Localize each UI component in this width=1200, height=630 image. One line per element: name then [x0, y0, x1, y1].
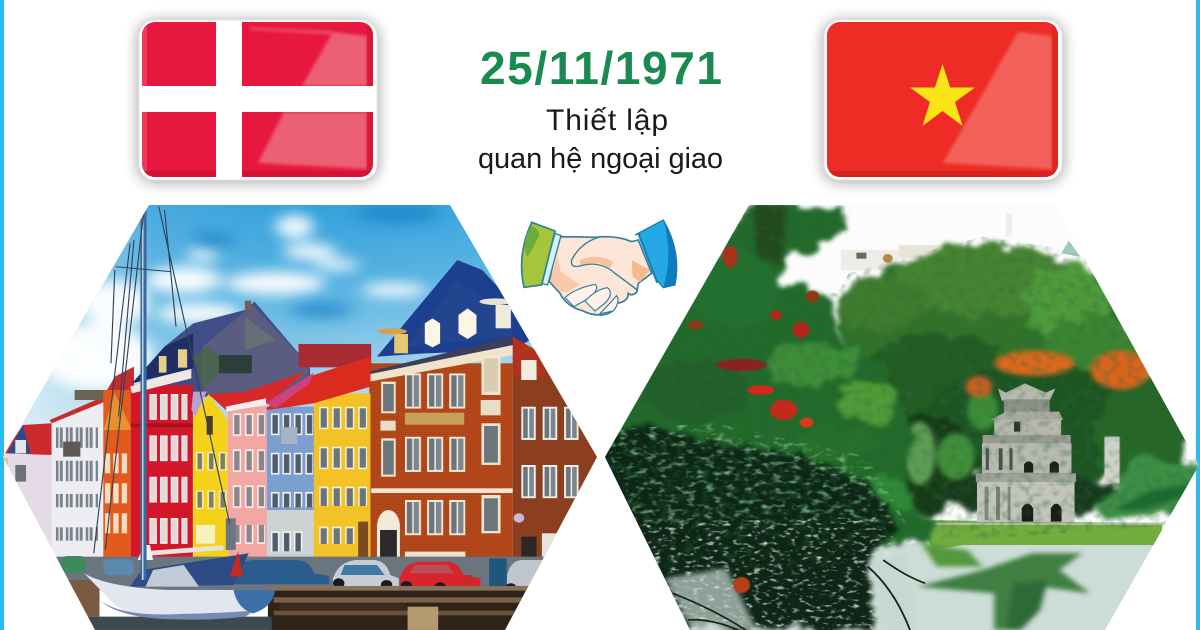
pink building: [228, 407, 267, 560]
fingers: [565, 284, 597, 307]
dark lower tree: [600, 423, 899, 630]
green cuff: [522, 222, 555, 287]
lake: [650, 543, 1154, 630]
background tree mass: [841, 243, 1193, 517]
light gaps between lower leaves: [640, 517, 894, 630]
brick building: [369, 363, 513, 577]
tree trunk top: [753, 203, 788, 267]
dock: [268, 586, 536, 630]
blue cuff: [635, 220, 677, 288]
grass bank: [918, 520, 1163, 550]
turtle tower: [976, 383, 1076, 522]
white building: [52, 398, 105, 560]
icon: star: [910, 64, 975, 126]
blue cuff band: [638, 232, 664, 282]
hand shading: [550, 255, 580, 292]
red flowers: [688, 246, 819, 593]
left pink white building: [3, 454, 52, 549]
open water patches: [665, 553, 918, 630]
caption: Thiết lập: [546, 104, 668, 137]
photo: Copenhagen Nyhavn harbour: [0, 200, 600, 630]
right border: [1196, 0, 1200, 630]
hands silhouette: [549, 237, 652, 315]
right leaves: [1094, 463, 1200, 520]
orange flame trees: [965, 351, 1150, 397]
orange building: [103, 390, 132, 560]
left border: [0, 0, 4, 630]
date heading: 25/11/1971: [480, 42, 722, 94]
quay and water: [68, 580, 100, 617]
red building: [131, 385, 193, 560]
lighter foliage accents: [903, 390, 998, 485]
distant skyline: [841, 207, 1080, 270]
street: [56, 556, 544, 590]
mast and rigging: [94, 207, 230, 580]
flag: Vietnam: [822, 20, 1064, 183]
upper right hand outline: [571, 237, 637, 290]
right pillar: [1104, 437, 1120, 483]
brick windows: [405, 373, 465, 409]
cars: [61, 556, 545, 593]
blue roof on brick building: [377, 260, 536, 357]
dark brick building: [513, 350, 600, 577]
flag: Denmark: [137, 20, 379, 183]
photo: Hoan Kiem lake and Turtle Tower: [600, 200, 1200, 630]
yellow building and red roof: [314, 393, 370, 560]
icon: handshake: [522, 220, 677, 315]
blue building: [267, 407, 315, 560]
left tree: [600, 203, 937, 573]
green flecks in dark tree: [609, 424, 906, 526]
caption: [478, 104, 723, 175]
foreground blurred branch: [918, 543, 1090, 630]
sky: [0, 200, 600, 467]
foliage texture: [600, 203, 1200, 573]
yellow gable building: [193, 394, 228, 560]
background purple-grey building: [165, 302, 310, 397]
caption: quan hệ ngoại giao: [478, 143, 723, 175]
green cuff band: [541, 233, 561, 285]
branches: [673, 560, 925, 630]
sailing boat: [84, 518, 276, 620]
